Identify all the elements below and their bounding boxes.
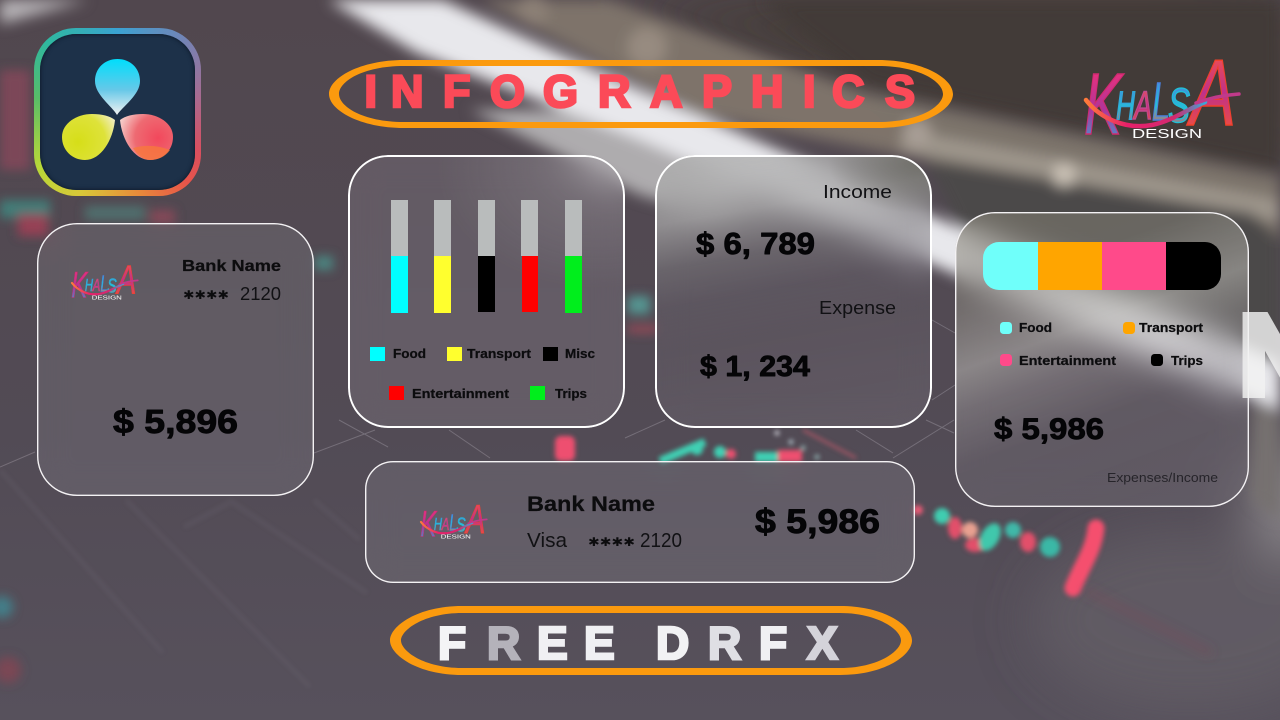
logo: Khalsa Design: L (1152, 72, 1170, 132)
logo: Khalsa Design (1084, 55, 1241, 145)
soft haze lower right (600, 0, 1280, 710)
legend: Trips (555, 386, 587, 401)
legend: Food (1019, 320, 1052, 335)
logo: Khalsa Design: H (1116, 84, 1135, 128)
balance: $ 5,986 (755, 503, 880, 541)
logo: small Khalsa Design (420, 496, 487, 545)
logo: small Khalsa Design: S (456, 513, 466, 536)
bank name: Bank Name (182, 258, 281, 275)
footer text: F R EE D R F X (438, 617, 838, 669)
legend: Entertainment (412, 386, 510, 401)
balance: $ 5,896 (113, 403, 238, 440)
logo: small Khalsa Design: DESIGN (441, 534, 471, 540)
blurred candles centre and right (555, 430, 1096, 588)
masked card number (183, 284, 281, 304)
legend (1000, 320, 1204, 368)
panel: bank card (37, 223, 314, 496)
card type and masked number: 2120 (640, 530, 682, 552)
legend (370, 346, 595, 401)
title pill outline (329, 60, 953, 128)
blurred candles left side (0, 70, 658, 683)
logo: small Khalsa Design: A (464, 496, 485, 542)
logo: small Khalsa Design: H (434, 514, 442, 534)
logo: small Khalsa Design: L (449, 510, 457, 536)
title text: INFOGRAPHICS (364, 66, 915, 117)
logo: small Khalsa Design: S (107, 274, 117, 297)
icon: three colour petals (62, 59, 173, 160)
footer banner (390, 606, 912, 675)
logo: Khalsa Design: A (1133, 84, 1152, 128)
logo: small Khalsa Design: K (420, 503, 438, 545)
icon background tile (40, 34, 195, 190)
logo: small Khalsa Design: A (441, 514, 449, 534)
panel: bar chart card (348, 155, 625, 428)
masked card number: ✱✱✱✱ (183, 288, 229, 302)
logo: small Khalsa Design: H (85, 275, 93, 295)
footer pill outline (390, 606, 912, 675)
legend: Misc (565, 346, 595, 361)
legend: Entertainment (1019, 353, 1117, 368)
legend: Transport (1139, 320, 1204, 335)
card type and masked number (527, 530, 682, 552)
panel: bank summary card (365, 461, 915, 583)
logo: Khalsa Design: DESIGN (1132, 126, 1202, 141)
logo: small Khalsa Design: K (71, 264, 89, 306)
card type and masked number: Visa (527, 530, 568, 552)
legend: Trips (1171, 353, 1203, 368)
income value: $ 6, 789 (696, 226, 815, 261)
bar chart (391, 200, 582, 313)
expense value: $ 1, 234 (700, 351, 810, 383)
expense label: Expense (819, 298, 896, 318)
logo: Khalsa Design: S (1168, 80, 1190, 133)
legend: Transport (467, 346, 532, 361)
logo: small Khalsa Design: L (100, 271, 108, 297)
logo: small Khalsa Design: DESIGN (92, 295, 122, 301)
income label: Income (823, 182, 892, 202)
bank name: Bank Name (527, 493, 655, 516)
logo: small Khalsa Design (71, 257, 138, 306)
caption: Expenses/Income (1107, 470, 1218, 485)
panel: income and expense card (655, 155, 932, 428)
total amount: $ 5,986 (994, 413, 1104, 446)
perspective grid lines (0, 320, 955, 467)
icon: DaVinci Resolve logo (34, 28, 201, 196)
masked card number: 2120 (240, 284, 281, 304)
title banner (329, 60, 1100, 128)
logo: small Khalsa Design: A (92, 275, 100, 295)
stacked bar (983, 242, 1221, 290)
legend: Food (393, 346, 426, 361)
logo: small Khalsa Design: A (115, 257, 136, 303)
card type and masked number: ✱✱✱✱ (588, 535, 635, 549)
panel: expense split card (955, 212, 1249, 507)
